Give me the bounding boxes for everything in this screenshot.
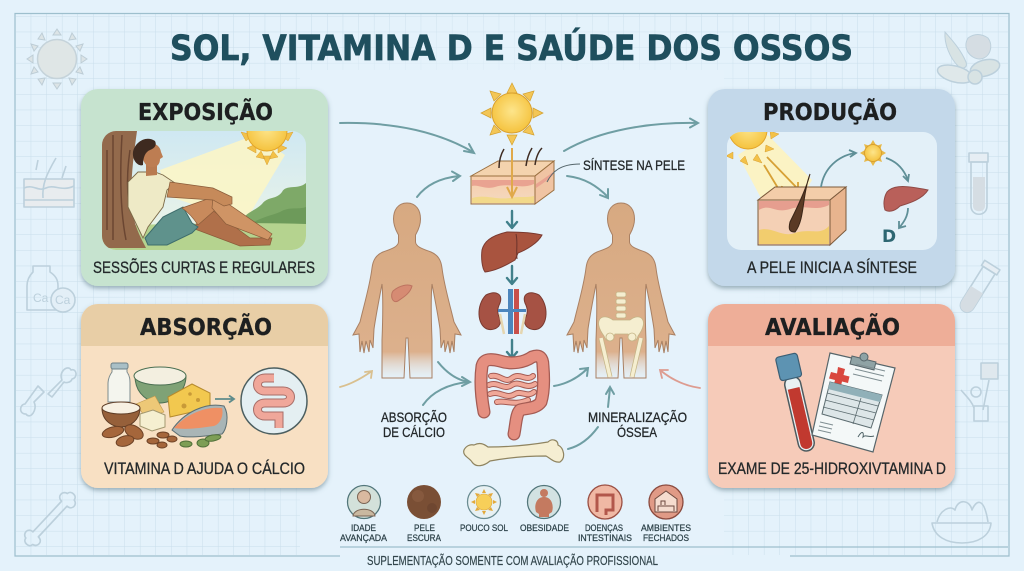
flow arrow: left body to skin (417, 172, 460, 197)
panel: avaliação (708, 304, 955, 488)
icon: faded calcium jar: Ca (55, 293, 71, 307)
risk: doenças intestinais (578, 485, 632, 544)
icon: blood tube (775, 353, 819, 453)
icon: faded sun (27, 29, 87, 89)
panel: absorção (81, 304, 328, 488)
down arrows (507, 211, 517, 358)
caption: produção: A PELE INICIA A SÍNTESE (747, 258, 917, 277)
risk: pele escura (407, 485, 442, 544)
illustration panel: skin synthesis (727, 132, 937, 250)
arrow: sun to skin (507, 148, 517, 197)
caption: avaliação: EXAME DE 25-HIDROXIVTAMINA D (718, 459, 946, 478)
milk bottle (108, 364, 130, 402)
icon: faded diagonal tube (956, 260, 1000, 316)
skin block (758, 187, 846, 200)
arrows: synthesis loop (821, 150, 909, 228)
salmon (172, 405, 227, 437)
leader and label: síntese na pele: SÍNTESE NA PELE (583, 157, 685, 173)
letter D: D (882, 227, 896, 247)
risk: doenças intestinais: DOENÇAS (585, 523, 623, 534)
shorts (145, 207, 198, 245)
skin block (471, 148, 554, 204)
kidneys (479, 289, 546, 334)
red cross (829, 367, 850, 388)
illustration: man resting under tree (102, 131, 306, 250)
neck (146, 164, 157, 176)
label: mineralização óssea: MINERALIZAÇÃO (588, 409, 687, 425)
panel: produção (708, 89, 955, 286)
near shin (212, 196, 272, 240)
body: left figure (353, 203, 461, 378)
icon: faded skin (24, 158, 74, 207)
tofu (140, 410, 165, 431)
head (143, 144, 163, 166)
center sun (481, 83, 543, 145)
header band: avaliação (708, 304, 955, 346)
liver in body (392, 285, 412, 302)
footer note: SUPLEMENTAÇÃO SOMENTE COM AVALIAÇÃO PROFISSIONAL (367, 554, 658, 568)
liver (884, 186, 928, 211)
sun (241, 132, 293, 165)
risk: idade avançada: IDADE (351, 523, 376, 534)
risk: ambientes fechados: AMBIENTES (641, 523, 691, 534)
heading: exposição: EXPOSIÇÃO (138, 98, 273, 126)
wooden bowl (102, 408, 140, 427)
risk: idade avançada: AVANÇADA (340, 533, 388, 544)
hair follicle (789, 174, 810, 232)
risk: ambientes fechados (641, 485, 691, 544)
intestine (481, 356, 544, 434)
label: mineralização óssea (588, 409, 687, 440)
table (822, 382, 882, 428)
icon: faded foods (936, 32, 1002, 86)
risk: obesidade: OBESIDADE (520, 523, 569, 534)
flow arrow: avaliação panel to body (660, 370, 700, 388)
caption: absorção: VITAMINA D AJUDA O CÁLCIO (104, 459, 305, 478)
sun beam (160, 139, 285, 216)
risk: ambientes fechados: FECHADOS (643, 533, 689, 544)
arm (167, 182, 232, 206)
title: SOL, VITAMINA D E SAÚDE DOS OSSOS (170, 27, 853, 69)
skeleton (599, 292, 643, 341)
flow arrow: absorção panel to body (340, 371, 372, 387)
icon: clipboard report (812, 353, 895, 452)
flow arrow: exposição to skin (340, 123, 474, 153)
leader and label: síntese na pele (547, 157, 685, 182)
flow arrow: skin to produção (564, 118, 698, 151)
icon: faded bone (20, 488, 80, 550)
small sun (860, 140, 886, 166)
risk: idade avançada (340, 486, 388, 544)
flow arrow: bone to label (568, 427, 598, 449)
icon: faded bowl (932, 502, 991, 543)
bushes (246, 183, 306, 222)
label: absorção de cálcio: ABSORÇÃO (381, 409, 447, 425)
flow arrow: label to intestine (423, 382, 468, 405)
icon: faded broken bone (21, 368, 76, 416)
arrow: food to gut (215, 396, 234, 402)
risk: pele escura: PELE (414, 523, 435, 534)
illustration: calcium foods (101, 363, 227, 448)
caption: exposição: SESSÕES CURTAS E REGULARES (93, 258, 315, 277)
bone (464, 440, 564, 466)
heading: absorção: ABSORÇÃO (140, 313, 272, 341)
tree trunk (102, 131, 146, 248)
icon: faded calcium jar: Ca (33, 291, 49, 305)
flow arrow: skin to right body (567, 176, 608, 198)
header band: absorção (81, 304, 328, 346)
almonds (101, 422, 177, 448)
rays into skin (764, 157, 798, 193)
shirt (128, 172, 175, 238)
far leg (192, 210, 272, 246)
risk: pouco sol: POUCO SOL (460, 523, 508, 534)
icon: faded test tube (969, 153, 988, 214)
green beans (180, 434, 221, 447)
label: absorção de cálcio (381, 409, 447, 440)
icon: intestine in circle (241, 368, 307, 434)
femurs (601, 338, 641, 377)
liver (482, 232, 542, 272)
label: absorção de cálcio: DE CÁLCIO (383, 424, 445, 440)
icon: faded figure (961, 363, 998, 421)
cheese (168, 384, 210, 417)
risk: doenças intestinais: INTESTINAIS (578, 533, 632, 544)
body: right figure (567, 203, 675, 378)
risk: pouco sol (460, 486, 508, 534)
flow arrow: body to intestine (438, 362, 470, 386)
flow arrow: label to skeleton (606, 387, 614, 407)
heading: avaliação: AVALIAÇÃO (765, 313, 900, 341)
flow arrow: intestine to right body (554, 368, 588, 386)
icon: faded calcium jar (27, 266, 75, 312)
risk: obesidade (520, 486, 569, 534)
near thigh (181, 200, 214, 226)
green bowl (135, 376, 186, 403)
heading: produção: PRODUÇÃO (763, 98, 897, 126)
risk: pele escura: ESCURA (407, 533, 442, 544)
grass (102, 223, 306, 250)
label: mineralização óssea: ÓSSEA (617, 424, 658, 440)
butter (136, 396, 164, 418)
panel: exposição (81, 89, 328, 286)
